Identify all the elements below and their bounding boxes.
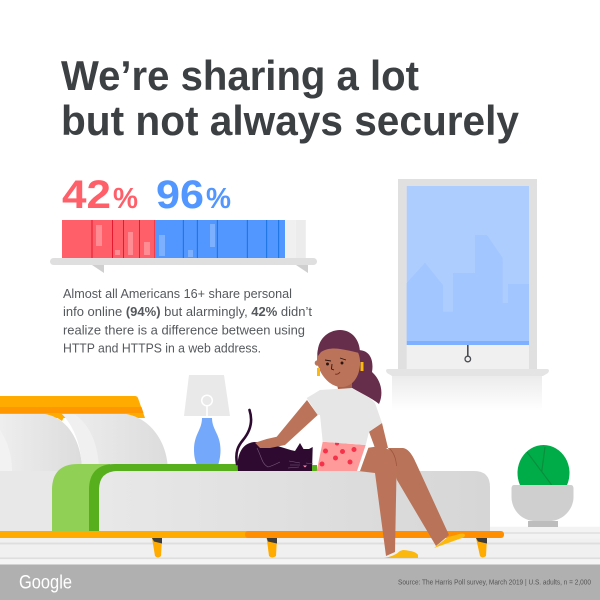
lamp	[184, 375, 230, 464]
window pane	[407, 186, 529, 369]
blind pull	[465, 345, 471, 362]
window sill	[386, 369, 549, 411]
sofa	[0, 396, 504, 558]
sofa legs	[152, 538, 487, 558]
lamp base	[194, 418, 220, 464]
title: We’re sharing a lot	[61, 52, 419, 99]
lamp shade	[184, 375, 230, 416]
face	[317, 340, 360, 387]
stat: 42%: %	[113, 183, 138, 215]
headboard	[0, 396, 145, 471]
body text: HTTP and HTTPS in a web address.	[63, 340, 261, 356]
facial features	[325, 358, 346, 374]
cat body	[238, 442, 313, 471]
sofa base rail	[0, 531, 504, 538]
city skyline	[407, 235, 529, 341]
Google logo wordmark: Google	[19, 572, 72, 594]
green blanket	[52, 464, 240, 531]
plant	[512, 445, 574, 527]
hair	[318, 330, 360, 356]
window frame	[398, 179, 537, 370]
front leg and thigh	[358, 446, 397, 556]
far arm	[369, 423, 388, 448]
neck	[336, 380, 352, 389]
pillow right	[62, 414, 168, 471]
red books: 42%	[62, 220, 155, 258]
pot foot	[528, 521, 558, 527]
title: but not always securely	[61, 97, 520, 144]
woman	[255, 330, 465, 558]
cat tail	[236, 410, 251, 464]
ponytail	[349, 350, 381, 404]
body text: realize there is a difference between using	[63, 322, 305, 338]
plant leaf	[518, 445, 570, 485]
blue books: 96%	[155, 220, 285, 258]
roller blind	[407, 186, 529, 341]
body text	[63, 286, 312, 356]
window	[386, 179, 549, 411]
back shoe	[434, 534, 465, 548]
lamp stem and switch	[202, 395, 212, 418]
leaf veins	[527, 447, 552, 485]
stat: 42%	[62, 173, 138, 217]
back leg	[388, 448, 449, 546]
shorts	[317, 442, 369, 471]
sofa seat left	[0, 471, 60, 531]
sofa seat main	[99, 471, 490, 531]
pillow left shade	[0, 430, 12, 471]
near arm	[255, 400, 318, 448]
body text: info online (94%) but alarmingly, 42% didn’t	[63, 304, 312, 319]
body text: Almost all Americans 16+ share personal	[63, 286, 292, 301]
ear	[315, 360, 320, 366]
cat details	[257, 448, 313, 468]
front shoe	[384, 550, 418, 558]
stat: 96%: 96	[156, 173, 204, 217]
footer bar	[0, 564, 600, 600]
grey books	[285, 220, 306, 258]
shelf	[50, 258, 317, 273]
pillow left	[0, 414, 82, 471]
plant pot	[512, 485, 574, 521]
earrings	[317, 362, 364, 376]
stat: 96%	[156, 173, 231, 217]
floor	[0, 527, 600, 565]
green blanket end	[312, 465, 317, 471]
bookshelf chart	[50, 220, 317, 273]
stat: 96%: %	[206, 183, 231, 215]
blind rail	[407, 341, 529, 345]
t-shirt	[307, 388, 382, 445]
pillow right highlight	[62, 414, 99, 471]
stat: 42%: 42	[62, 173, 111, 217]
knee crease	[390, 449, 396, 466]
title	[61, 52, 520, 144]
cat	[236, 410, 313, 471]
